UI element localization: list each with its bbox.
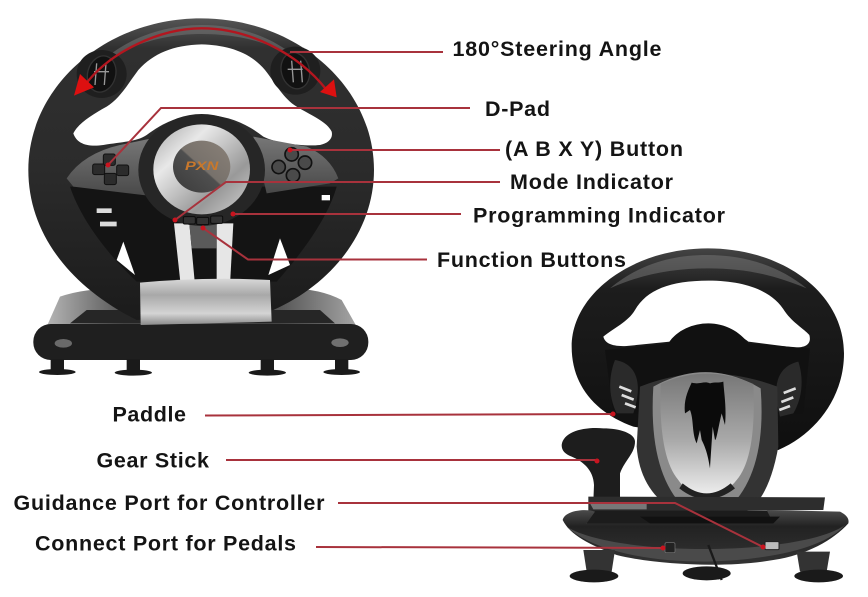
wheel base (33, 288, 368, 376)
chrome bar (140, 279, 272, 325)
feet (570, 550, 843, 582)
callout: programming indicator: Programming Indicator (473, 204, 726, 228)
rear body (637, 373, 778, 517)
steering wheel front view (28, 18, 374, 376)
callout: connect port for pedals: Connect Port for Pedals (35, 532, 296, 556)
function buttons (183, 216, 223, 225)
silver spokes (174, 223, 233, 285)
logo: PXN (185, 159, 219, 173)
shoulder button left (77, 50, 127, 98)
callout: function buttons (200, 226, 626, 272)
callout: connect port for pedals (35, 532, 666, 556)
shoulder button right (270, 47, 320, 95)
paddle right (776, 362, 802, 417)
rim highlight (610, 255, 807, 288)
white gaps between spokes (97, 195, 330, 275)
gear stick (562, 428, 635, 502)
callout: a b x y button (288, 137, 683, 161)
centre hub (138, 114, 265, 226)
callout: programming indicator (230, 204, 726, 228)
hub backing (70, 187, 337, 282)
rear base (563, 497, 849, 565)
callout: gear stick: Gear Stick (96, 448, 209, 472)
steering wheel rear view (562, 248, 849, 582)
left wing plate (67, 138, 157, 197)
a b x y buttons (272, 148, 312, 182)
rear hub dome (605, 323, 810, 413)
callout: guidance port for controller (14, 491, 766, 550)
callout: a b x y button: (A B X Y) Button (505, 137, 683, 161)
silver shield (653, 372, 762, 507)
usb cable (708, 545, 722, 580)
callout: gear stick (96, 448, 600, 472)
wheel rim (28, 18, 374, 320)
paddle left (610, 360, 638, 413)
callout: mode indicator (172, 170, 674, 222)
flame logo (685, 382, 726, 468)
d-pad (93, 154, 129, 185)
callout: guidance port for controller: Guidance Port for Controller (14, 491, 325, 515)
callout: d-pad: D-Pad (485, 97, 550, 121)
rear rim (572, 248, 844, 450)
callout: 180 degree steering angle: 180°Steering Angle (452, 37, 662, 61)
callout: function buttons: Function Buttons (437, 248, 626, 272)
callout: mode indicator: Mode Indicator (510, 170, 674, 194)
callout: d-pad (106, 97, 550, 168)
pedal port (665, 543, 675, 553)
callout: paddle: Paddle (112, 402, 186, 426)
steering angle arrow (74, 28, 337, 97)
wheel rim highlight (92, 25, 313, 73)
usb port (765, 542, 779, 550)
callout: paddle (112, 402, 616, 426)
right wing plate (253, 137, 338, 193)
